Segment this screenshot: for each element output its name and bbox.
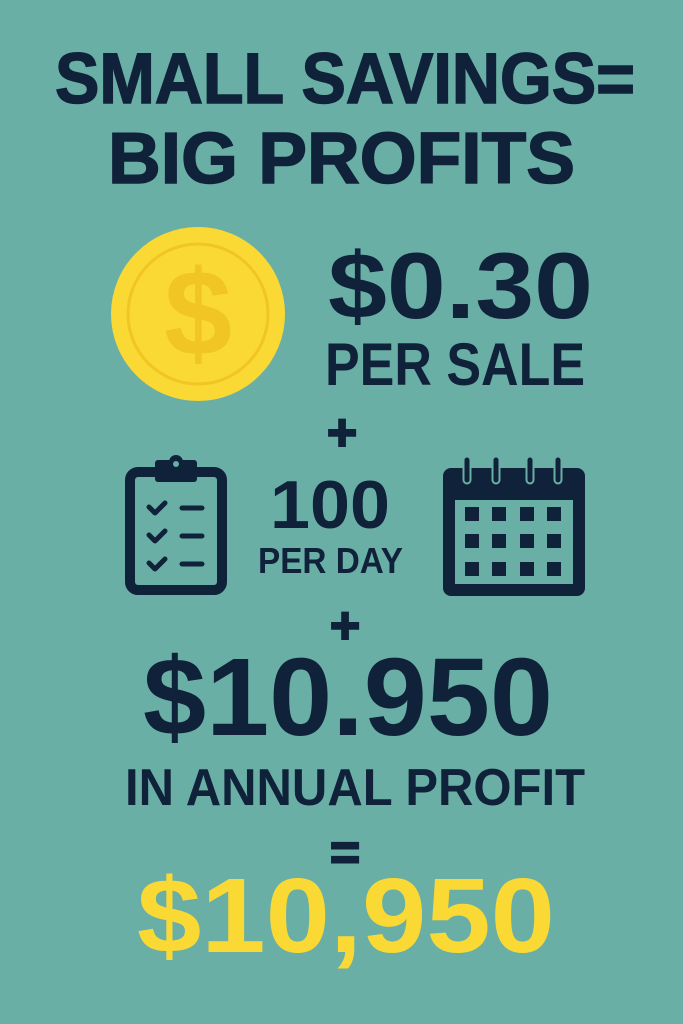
text: per day — [258, 467, 403, 581]
title: SMALL SAVINGS= — [55, 40, 635, 119]
text: per day: PER DAY — [258, 540, 403, 581]
result total: $10,950 — [137, 857, 555, 975]
text: per day: 100 — [270, 467, 390, 543]
text: per sale amount: $0.30 — [328, 233, 593, 338]
icon: clipboard — [130, 455, 222, 590]
text: per sale amount — [325, 233, 593, 398]
text: annual profit — [125, 636, 585, 817]
plus sign 2: + — [330, 597, 360, 655]
icon: coin: $ — [164, 245, 232, 381]
text: annual profit: $10.950 — [143, 636, 553, 759]
plus sign 1: + — [327, 404, 357, 462]
title: BIG PROFITS — [108, 119, 575, 199]
icon: coin — [111, 227, 285, 401]
text: per sale amount: PER SALE — [325, 331, 585, 398]
text: annual profit: IN ANNUAL PROFIT — [125, 759, 585, 817]
icon: calendar — [443, 460, 585, 596]
title — [55, 40, 635, 199]
equals sign: = — [330, 824, 360, 882]
